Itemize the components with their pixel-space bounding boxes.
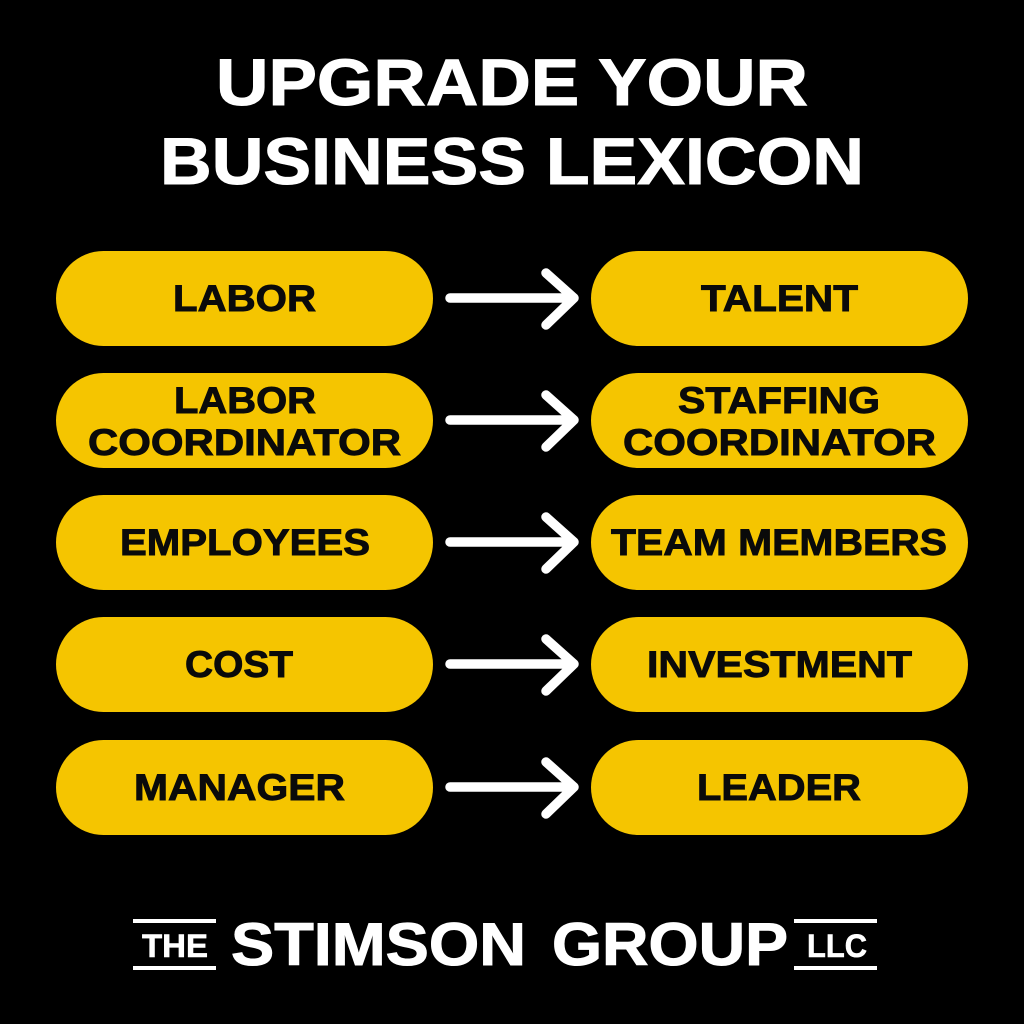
row 4: cost to investment (56, 617, 968, 712)
pill: staffing coordinator: COORDINATOR (623, 421, 936, 463)
pill: team members (591, 495, 968, 590)
row 1: labor to talent (56, 251, 968, 346)
pill: talent: TALENT (701, 277, 858, 319)
footer logo: LLC (807, 928, 867, 964)
footer logo: STIMSON (231, 911, 526, 978)
title: UPGRADE YOUR (216, 45, 808, 119)
pill: labor coordinator: COORDINATOR (88, 421, 401, 463)
row 3: employees to team members (56, 495, 968, 590)
pill: leader: LEADER (697, 766, 861, 808)
arrow (450, 762, 574, 814)
arrow (450, 517, 574, 569)
arrow (450, 395, 574, 447)
pill: labor (56, 251, 433, 346)
pill: employees (56, 495, 433, 590)
pill: team members: TEAM MEMBERS (611, 521, 947, 563)
pill: staffing coordinator (591, 373, 968, 468)
row 5: manager to leader (56, 740, 968, 835)
pill: manager (56, 740, 433, 835)
pill: labor coordinator (56, 373, 433, 468)
pill: manager: MANAGER (134, 766, 345, 808)
footer logo: THE (142, 928, 208, 964)
pill: labor coordinator: LABOR (174, 379, 316, 421)
pill: cost: COST (185, 643, 293, 685)
pill: investment: INVESTMENT (647, 643, 912, 685)
pill: employees: EMPLOYEES (120, 521, 370, 563)
row 2: labor coordinator to staffing coordinator (56, 373, 968, 468)
arrow (450, 273, 574, 325)
footer logo (133, 911, 877, 978)
pill: labor: LABOR (173, 277, 316, 319)
pill: leader (591, 740, 968, 835)
arrow (450, 639, 574, 691)
pill: staffing coordinator: STAFFING (678, 379, 880, 421)
title: BUSINESS LEXICON (160, 124, 864, 198)
footer logo: GROUP (552, 911, 788, 978)
pill: talent (591, 251, 968, 346)
title (160, 45, 864, 198)
pill: investment (591, 617, 968, 712)
pill: cost (56, 617, 433, 712)
